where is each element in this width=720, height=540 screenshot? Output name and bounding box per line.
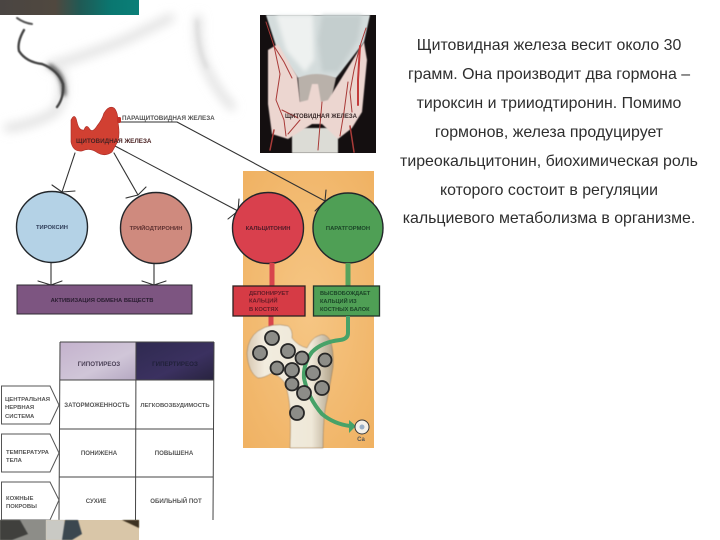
row label: body temperature: ТЕМПЕРАТУРА bbox=[6, 450, 50, 456]
description text: тиреокальцитонин, биохимическая роль bbox=[400, 153, 698, 170]
neck sketch bbox=[8, 18, 232, 128]
row label: skin: ПОКРОВЫ bbox=[6, 504, 37, 510]
orange panel: calcium metabolism bbox=[243, 171, 374, 448]
description text bbox=[400, 37, 698, 227]
hormone circle: triiodothyronine: ТРИЙОДТИРОНИН bbox=[130, 224, 182, 232]
row label: skin: КОЖНЫЕ bbox=[6, 496, 33, 502]
row label: central nervous system bbox=[2, 386, 59, 424]
red box: calcium deposit: ДЕПОНИРУЕТ bbox=[249, 291, 289, 297]
table cells bbox=[64, 402, 210, 505]
header: hyperthyroidism: ГИПЕРТИРЕОЗ bbox=[152, 361, 198, 368]
row label: central nervous system: НЕРВНАЯ bbox=[5, 405, 34, 411]
comparison table bbox=[59, 342, 214, 520]
description text: грамм. Она производит два гормона – bbox=[408, 66, 690, 83]
description text: кальциевого метаболизма в организме. bbox=[403, 210, 695, 227]
table cells: ПОНИЖЕНА bbox=[81, 450, 118, 457]
red box: calcium deposit bbox=[233, 286, 305, 316]
thyroid labels: ЩИТОВИДНАЯ ЖЕЛЕЗА bbox=[76, 138, 152, 145]
header: hypothyroidism: ГИПОТИРЕОЗ bbox=[78, 361, 120, 368]
description text: гормонов, железа продуцирует bbox=[435, 124, 663, 141]
femur bone with calcium deposits bbox=[247, 316, 369, 448]
bottom-left photo strip bbox=[0, 520, 139, 540]
hormone circle: thyroxine bbox=[16, 192, 88, 262]
calcium ion icon: Ca bbox=[357, 437, 365, 443]
table cells: ПОВЫШЕНА bbox=[155, 450, 194, 457]
row label: central nervous system: СИСТЕМА bbox=[5, 414, 35, 420]
purple bar: metabolism activation bbox=[17, 285, 192, 314]
hormone circle: parathormone bbox=[313, 193, 383, 263]
thyroid gland diagram: ПАРАЩИТОВИДНАЯ ЖЕЛЕЗА bbox=[122, 115, 215, 122]
connector lines and arrows bbox=[38, 122, 326, 285]
green box: calcium release: ВЫСВОБОЖДАЕТ bbox=[320, 291, 371, 297]
thyroid anatomy photo bbox=[260, 15, 376, 153]
table cells: СУХИЕ bbox=[86, 498, 106, 505]
red box: calcium deposit: В КОСТЯХ bbox=[249, 307, 279, 313]
description text: Щитовидная железа весит около 30 bbox=[417, 37, 681, 54]
red box: calcium deposit: КАЛЬЦИЙ bbox=[249, 296, 278, 304]
hormone circle: calcitonin: КАЛЬЦИТОНИН bbox=[246, 226, 290, 232]
green stem bbox=[346, 263, 350, 286]
thyroid gland diagram bbox=[71, 107, 215, 155]
row label: body temperature bbox=[2, 434, 59, 472]
thyroid photo label: ЩИТОВИДНАЯ ЖЕЛЕЗА bbox=[285, 114, 358, 120]
hormone circle: parathormone: ПАРАТГОРМОН bbox=[326, 226, 370, 232]
top-left photo strip bbox=[0, 0, 139, 15]
hormone circle: calcitonin bbox=[232, 192, 304, 264]
description text: которого состоит в регуляции bbox=[440, 182, 658, 199]
row label: body temperature: ТЕЛА bbox=[6, 458, 23, 464]
red stem arrows bbox=[268, 263, 274, 330]
header: hyperthyroidism bbox=[136, 342, 214, 380]
table cells: ОБИЛЬНЫЙ ПОТ bbox=[150, 497, 202, 505]
row label: skin bbox=[2, 482, 59, 520]
purple bar: metabolism activation: АКТИВИЗАЦИЯ ОБМЕНА ВЕЩЕСТВ bbox=[51, 298, 153, 304]
green box: calcium release: КОСТНЫХ БАЛОК bbox=[320, 307, 370, 313]
green box: calcium release: КАЛЬЦИЙ ИЗ bbox=[320, 297, 357, 305]
header: hypothyroidism bbox=[60, 342, 136, 380]
hormone circle: triiodothyronine bbox=[120, 192, 192, 264]
table cells: ЗАТОРМОЖЕННОСТЬ bbox=[64, 402, 130, 409]
green box: calcium release bbox=[314, 286, 380, 316]
description text: тироксин и трииодтиронин. Помимо bbox=[417, 95, 682, 112]
row label: central nervous system: ЦЕНТРАЛЬНАЯ bbox=[5, 397, 50, 403]
hormone circle: thyroxine: ТИРОКСИН bbox=[36, 225, 68, 231]
table cells: ЛЕГКОВОЗБУДИМОСТЬ bbox=[140, 403, 210, 409]
